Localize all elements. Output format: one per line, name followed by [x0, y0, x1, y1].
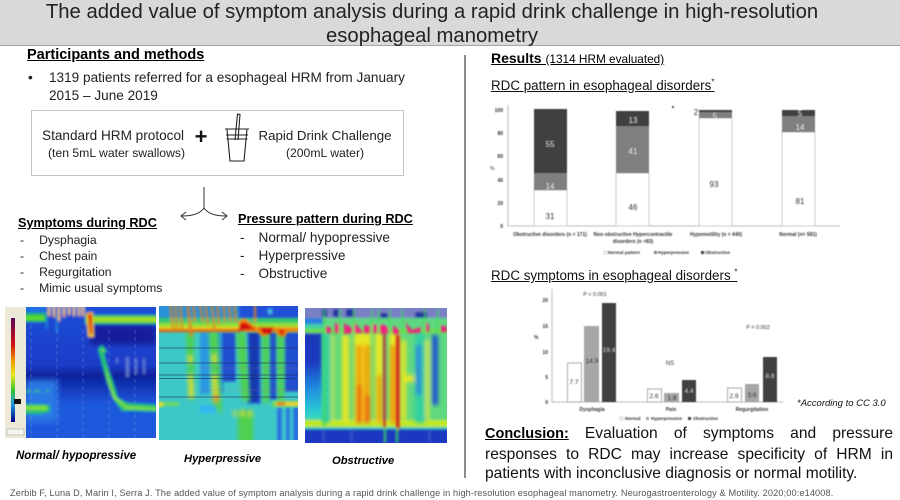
chart: RDC symptoms grouped bars: 4.4 [684, 388, 694, 395]
legend [620, 416, 719, 421]
chart: RDC symptoms grouped bars: 7.7 [569, 379, 579, 386]
chart: RDC pattern stacked bars: Non obstructive Hypercontractile [594, 232, 673, 238]
icon: drink cup [225, 113, 249, 162]
list: symptoms: - Dysphagia [20, 233, 97, 247]
chart: RDC pattern stacked bars: 13 [629, 116, 638, 125]
chart: RDC pattern stacked bars: 93 [710, 180, 719, 189]
bars: regurgitation [728, 357, 777, 402]
label: obstructive: Obstructive [332, 455, 394, 467]
chart: RDC symptoms grouped bars: 10 [542, 350, 548, 356]
legend: Hyperpressive [658, 250, 690, 255]
list: symptoms: - Mimic usual symptoms [20, 281, 162, 295]
chart: RDC symptoms grouped bars: P = 0.002 [746, 325, 770, 331]
text: standard HRM protocol: Standard HRM protocol [42, 128, 184, 143]
title: The added value of symptom analysis during a rapid drink challenge in high-resolution [46, 1, 818, 23]
text: rapid drink challenge [258, 128, 392, 160]
conclusion: patients with inconclusive diagnosis or normal motility. [485, 465, 857, 482]
title [0, 0, 900, 46]
icon: plus: + [195, 124, 207, 149]
conclusion: Conclusion: Evaluation of symptoms and pressure [485, 425, 893, 442]
chart: normal/hypopressive manometry [5, 307, 156, 438]
chart: RDC symptoms grouped bars: NS [666, 361, 674, 367]
chart: RDC symptoms grouped bars: Regurgitation [736, 407, 768, 413]
legend: Normal [625, 416, 641, 421]
label: hyperpressive: Hyperpressive [184, 453, 261, 465]
chart: hyperpressive manometry [159, 306, 298, 440]
legend: Obstructive [705, 250, 731, 255]
bar: non-obstructive hypercontractile disorders [616, 111, 649, 226]
text: patients [28, 70, 405, 103]
text: rapid drink challenge: Rapid Drink Challenge [258, 128, 392, 143]
list: symptoms: - Chest pain [20, 249, 97, 263]
heading: RDC symptoms: RDC symptoms in esophageal disorders * [491, 268, 738, 283]
chart: RDC pattern stacked bars: 100 [495, 108, 503, 114]
chart: RDC symptoms grouped bars: 8.8 [765, 373, 775, 380]
chart: RDC pattern stacked bars: 55 [546, 140, 555, 149]
legend: Normal pattern [608, 250, 640, 255]
chart: RDC symptoms grouped bars: % [534, 335, 539, 341]
chart: RDC symptoms grouped bars: 5 [545, 375, 548, 381]
bar: obstructive disorders [534, 109, 567, 226]
chart: RDC pattern stacked bars: 40 [497, 178, 503, 184]
list: pressure patterns: - Normal/ hypopressive [240, 230, 390, 245]
bars: dysphagia [568, 303, 616, 402]
manometry plots [5, 306, 447, 443]
list: pressure patterns [240, 230, 390, 281]
bar: normal [782, 110, 815, 226]
chart: RDC pattern stacked bars: 0 [500, 224, 503, 230]
heading: RDC pattern: RDC pattern in esophageal disorders* [491, 78, 714, 93]
chart: RDC pattern stacked bars: Obstructive disorders (n = 171) [513, 232, 587, 238]
chart: RDC pattern stacked bars: 81 [796, 197, 805, 206]
text: patients: 1319 patients referred for a esophageal HRM from January [49, 70, 405, 85]
chart: RDC pattern stacked bars: 41 [629, 147, 638, 156]
title: esophageal manometry [326, 25, 538, 47]
legend: Obstructive [693, 416, 719, 421]
list: pressure patterns: - Hyperpressive [240, 248, 345, 263]
list: pressure patterns: - Obstructive [240, 266, 327, 281]
divider [464, 55, 466, 478]
chart: RDC symptoms grouped bars: 14.9 [586, 358, 599, 365]
chart: RDC pattern stacked bars: % [490, 166, 495, 172]
chart: obstructive manometry [305, 308, 447, 443]
chart: RDC pattern stacked bars: disorders (n =83) [613, 239, 654, 245]
text: standard HRM protocol [42, 128, 185, 160]
chart: RDC symptoms grouped bars: 20 [542, 298, 548, 304]
citation: Zerbib F, Luna D, Marin I, Serra J. The added value of symptom analysis during a rapid drink challenge in high-resolution esophageal manometry. Neurogastroenterology & Motility. 2020;00:e14008. [10, 488, 833, 498]
chart: RDC symptoms grouped bars: 0 [545, 400, 548, 406]
text: patients: 2015 – June 2019 [49, 88, 158, 103]
chart: RDC pattern stacked bars: 31 [546, 212, 555, 221]
bars: pain [648, 380, 696, 402]
list: symptoms [20, 233, 162, 295]
heading: pressure pattern during RDC: Pressure pattern during RDC [238, 212, 413, 226]
label: normal/hypopressive: Normal/ hypopressive [16, 450, 136, 462]
chart: RDC symptoms grouped bars: 2.6 [649, 393, 659, 400]
note: according to CC 3.0: *According to CC 3.0 [797, 398, 886, 409]
chart: RDC symptoms grouped bars: P < 0.001 [583, 292, 607, 298]
chart: RDC pattern stacked bars: 5 [713, 112, 718, 121]
conclusion [485, 425, 893, 482]
conclusion: responses to RDC may increase specificity of HRM in [485, 446, 893, 462]
chart: RDC pattern stacked bars: 2 [694, 108, 699, 117]
chart: RDC symptoms grouped bars: Pain [666, 407, 676, 413]
heading: participants and methods: Participants and methods [27, 47, 204, 63]
legend: Hyperpressive [651, 416, 683, 421]
chart: RDC symptoms grouped bars: 1.8 [667, 395, 677, 402]
chart: RDC symptoms grouped bars: 2.9 [729, 393, 739, 400]
chart: RDC pattern stacked bars: 14 [546, 182, 555, 191]
chart: RDC pattern stacked bars: 46 [629, 203, 638, 212]
list: symptoms: - Regurgitation [20, 265, 112, 279]
chart: RDC symptoms grouped bars: Dysphagia [579, 407, 605, 413]
chart: RDC pattern stacked bars: 14 [796, 123, 805, 132]
heading: results: Results (1314 HRM evaluated) [491, 50, 664, 66]
text: rapid drink challenge: (200mL water) [286, 146, 364, 160]
chart: RDC pattern stacked bars: Hypomotility (n = 440) [690, 232, 742, 238]
legend [604, 250, 731, 255]
chart: RDC pattern stacked bars: 80 [497, 131, 503, 137]
chart: RDC symptoms grouped bars: 19.4 [603, 347, 616, 354]
chart: RDC pattern stacked bars: 20 [497, 201, 503, 207]
text: standard HRM protocol: (ten 5mL water swallows) [48, 146, 185, 160]
chart: RDC pattern stacked bars: Normal (n= 581) [779, 232, 817, 238]
heading: symptoms during RDC: Symptoms during RDC [18, 216, 157, 230]
chart: RDC symptoms grouped bars: 15 [542, 324, 548, 330]
chart: RDC pattern stacked bars: 5 [798, 109, 803, 118]
text: patients: • [28, 70, 33, 85]
bar: hypomotility [699, 110, 732, 226]
chart: RDC pattern stacked bars: 60 [497, 154, 503, 160]
panel: protocol box [31, 110, 404, 176]
chart: RDC symptoms grouped bars: 3.6 [747, 392, 757, 399]
